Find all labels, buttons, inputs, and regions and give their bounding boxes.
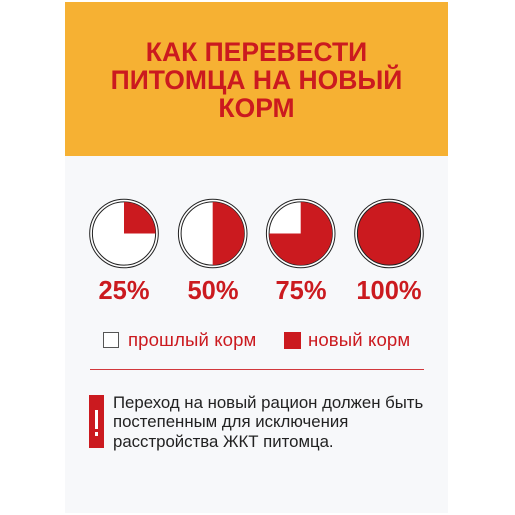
title: [111, 37, 402, 123]
panel: background card: [65, 2, 448, 513]
title: КАК ПЕРЕВЕСТИ: [146, 37, 367, 67]
title: КОРМ: [218, 93, 295, 123]
icon: exclamation mark: [89, 395, 104, 448]
pie: 25%: [90, 199, 158, 268]
warning text: постепенным для исключения: [113, 412, 348, 431]
pie: 75%: [266, 199, 335, 268]
legend swatch: old food: [103, 332, 119, 348]
warning text: [113, 392, 423, 450]
divider: [90, 369, 424, 370]
legend label: new food: новый корм: [308, 329, 410, 350]
label: 25%: 25%: [98, 277, 150, 305]
legend swatch: new food: [284, 332, 301, 349]
header band: [65, 2, 448, 156]
label: 100%: 100%: [356, 277, 422, 305]
warning text: Переход на новый рацион должен быть: [113, 392, 423, 412]
pie: 50%: [178, 199, 247, 268]
label: 75%: 75%: [275, 277, 327, 305]
pie: 100%: [355, 199, 423, 268]
title: ПИТОМЦА НА НОВЫЙ: [111, 65, 402, 95]
legend label: old food: прошлый корм: [128, 329, 256, 350]
label: 50%: 50%: [187, 277, 239, 305]
warning text: расстройства ЖКТ питомца.: [113, 432, 334, 450]
